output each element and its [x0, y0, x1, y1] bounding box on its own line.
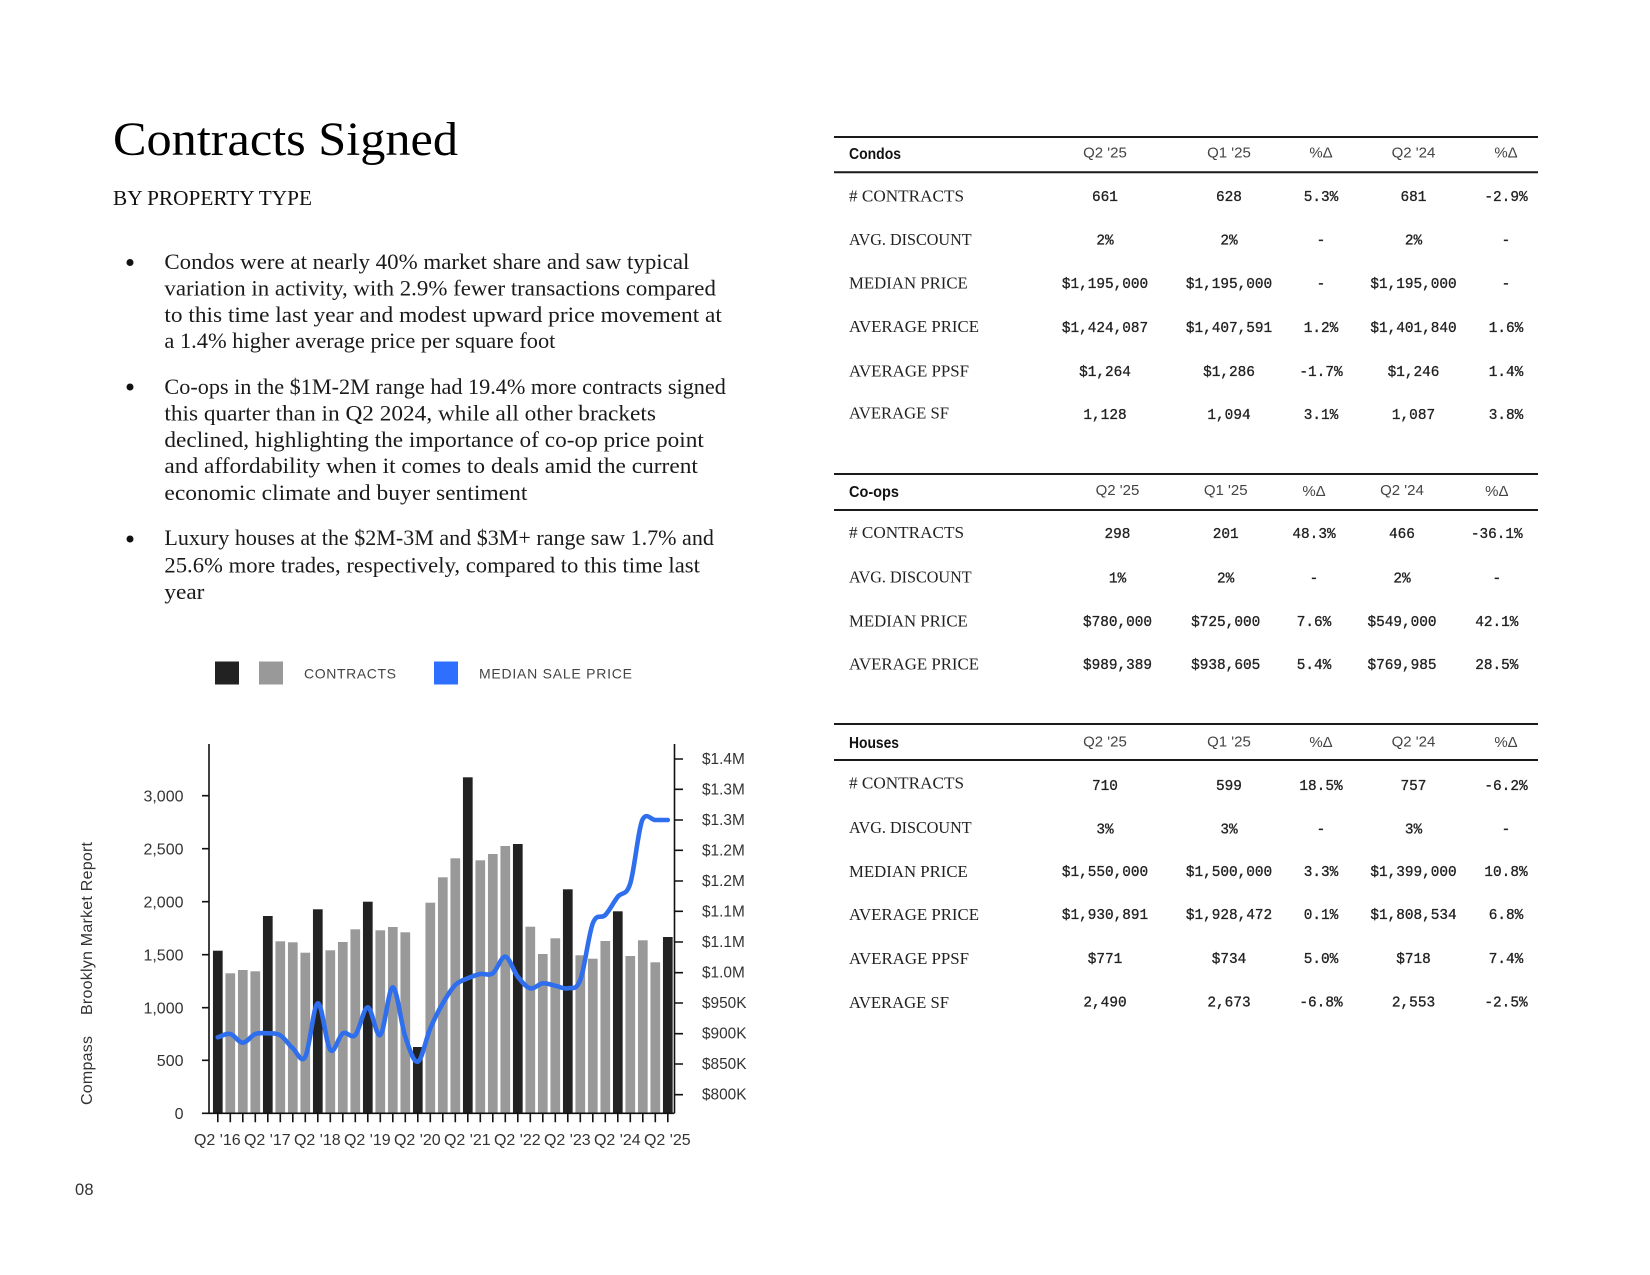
row: median price: 7.6% — [1297, 615, 1332, 631]
header row: %Δ — [1494, 144, 1518, 162]
right axis labels: $1.1M — [702, 934, 745, 951]
title: Contracts Signed — [113, 113, 458, 166]
right axis labels: $900K — [702, 1026, 747, 1042]
x axis labels: Q2 '21 — [444, 1132, 491, 1149]
row: average price: 0.1% — [1304, 908, 1339, 924]
row: avg discount — [849, 818, 1510, 838]
right axis labels: $800K — [702, 1086, 747, 1104]
header row: %Δ — [1302, 483, 1326, 500]
row: # contracts: 681 — [1401, 190, 1426, 206]
side label: Brooklyn Market Report — [79, 841, 96, 1015]
row: # contracts — [849, 186, 1528, 206]
row: avg discount: 3% — [1096, 822, 1114, 838]
header row: Co-ops — [849, 484, 899, 501]
row: average price: $1,808,534 — [1370, 908, 1457, 924]
subtitle: BY PROPERTY TYPE — [113, 186, 312, 210]
bullet list — [126, 249, 726, 604]
row: # contracts: 5.3% — [1304, 190, 1339, 206]
row: average price: AVERAGE PRICE — [849, 654, 979, 674]
header row — [849, 734, 1518, 752]
row: average price: $769,985 — [1367, 658, 1437, 674]
row: average sf: AVERAGE SF — [849, 993, 949, 1012]
row: avg discount: 2% — [1217, 571, 1235, 587]
row: median price: - — [1502, 277, 1510, 293]
right axis labels: $1.1M — [702, 904, 745, 920]
page number: 08 — [75, 1181, 94, 1199]
right axis labels: $1.3M — [702, 782, 745, 798]
row: median price: $1,550,000 — [1062, 865, 1148, 881]
row: average price: $1,401,840 — [1370, 321, 1457, 337]
row: average ppsf: $1,246 — [1388, 365, 1439, 381]
left axis labels: 500 — [157, 1053, 184, 1070]
row: # contracts — [849, 523, 1523, 543]
row: average sf: AVERAGE SF — [849, 404, 949, 422]
header row: Q2 '25 — [1083, 734, 1127, 750]
legend: MEDIAN SALE PRICE — [479, 666, 632, 682]
row: average price: 1.2% — [1304, 321, 1339, 337]
row: median price: $549,000 — [1367, 615, 1437, 631]
bullet: co-ops: Co-ops in the $1M-2M range had 19.4% more contracts signed — [164, 374, 726, 399]
row: average ppsf: $1,286 — [1203, 365, 1255, 381]
side label — [79, 841, 96, 1105]
left axis labels: 1,000 — [143, 1000, 184, 1018]
row: avg discount: 3% — [1220, 822, 1238, 838]
row: median price: 10.8% — [1484, 865, 1528, 881]
row: avg discount: 2% — [1393, 571, 1411, 587]
bullet: houses: 25.6% more trades, respectively, compared to this time last — [164, 552, 700, 578]
bullet: co-ops: declined, highlighting the importance of co-op price point — [164, 427, 704, 452]
row: avg discount: 2% — [1096, 234, 1114, 250]
row: average ppsf: 5.0% — [1304, 952, 1339, 968]
row: median price: 3.3% — [1304, 865, 1339, 881]
row: avg discount: 1% — [1109, 571, 1126, 587]
right axis labels — [702, 751, 747, 1104]
left axis labels: 1,500 — [143, 948, 184, 964]
row: median price: - — [1317, 277, 1325, 293]
left axis — [202, 744, 674, 1113]
row: average ppsf — [849, 362, 1524, 381]
row: median price: MEDIAN PRICE — [849, 612, 968, 630]
bullet: co-ops: economic climate and buyer sentiment — [164, 480, 527, 505]
row: median price: $1,500,000 — [1186, 865, 1272, 881]
bullet: co-ops: this quarter than in Q2 2024, while all other brackets — [164, 400, 656, 426]
row: average price: 28.5% — [1475, 658, 1519, 674]
row: median price: 42.1% — [1475, 615, 1519, 631]
row: average price: AVERAGE PRICE — [849, 905, 979, 924]
bullet: houses — [126, 525, 714, 604]
row: average sf: 1,087 — [1392, 408, 1435, 424]
header row: Q2 '25 — [1083, 144, 1127, 162]
row: average price: AVERAGE PRICE — [849, 317, 979, 336]
row: average sf: -6.8% — [1299, 996, 1343, 1012]
row: average sf: 2,553 — [1392, 996, 1435, 1012]
row: avg discount: - — [1502, 822, 1510, 838]
header row: Condos — [849, 146, 901, 163]
right axis labels: $1.2M — [702, 842, 745, 860]
row: avg discount — [849, 230, 1510, 250]
row: median price: $780,000 — [1083, 615, 1152, 631]
right axis labels: $1.4M — [702, 751, 745, 768]
row: avg discount: 3% — [1405, 822, 1422, 838]
x axis labels: Q2 '22 — [494, 1132, 541, 1149]
row: average price: $1,407,591 — [1186, 321, 1272, 337]
header row — [849, 144, 1518, 163]
row: average price: $1,930,891 — [1062, 908, 1148, 924]
row: average price: $1,424,087 — [1062, 321, 1148, 337]
header row: Q1 '25 — [1204, 482, 1248, 499]
right axis labels: $1.2M — [702, 873, 745, 890]
x axis labels — [194, 1132, 691, 1149]
header row: Q2 '24 — [1392, 734, 1435, 750]
row: average ppsf: 7.4% — [1489, 952, 1524, 968]
row: average ppsf: 1.4% — [1489, 365, 1524, 381]
row: # contracts: 201 — [1213, 527, 1239, 543]
bullet: houses: year — [164, 579, 205, 604]
row: average ppsf: $734 — [1212, 952, 1246, 968]
left axis labels: 0 — [175, 1106, 184, 1123]
row: average price — [849, 654, 1519, 674]
row: average ppsf: -1.7% — [1299, 365, 1343, 381]
row: median price — [849, 612, 1519, 631]
row: average price: $938,605 — [1191, 658, 1260, 674]
row: # contracts: 466 — [1389, 527, 1415, 543]
row: # contracts: 628 — [1216, 190, 1242, 206]
row: # contracts: # CONTRACTS — [849, 186, 964, 206]
row: median price: $1,195,000 — [1186, 277, 1272, 293]
row: avg discount: - — [1317, 822, 1325, 838]
right axis labels: $1.0M — [702, 964, 745, 982]
row: median price: MEDIAN PRICE — [849, 274, 968, 292]
left axis labels — [143, 788, 184, 1123]
row: # contracts: 710 — [1092, 779, 1118, 795]
row: average ppsf: $718 — [1396, 952, 1431, 968]
x axis ticks — [218, 1113, 668, 1122]
bullet: condos: Condos were at nearly 40% market share and saw typical — [164, 249, 689, 274]
row: # contracts: -2.9% — [1484, 190, 1528, 206]
header row: %Δ — [1309, 734, 1333, 751]
side label: Compass — [79, 1036, 96, 1105]
row: # contracts: 599 — [1216, 779, 1242, 795]
row: avg discount: AVG. DISCOUNT — [849, 818, 972, 837]
row: average ppsf: $771 — [1088, 952, 1122, 968]
bullet: condos: variation in activity, with 2.9% fewer transactions compared — [164, 276, 716, 300]
row: # contracts: 661 — [1092, 190, 1118, 206]
row: average ppsf — [849, 949, 1524, 968]
row: # contracts: 757 — [1401, 779, 1426, 795]
row: median price: $1,399,000 — [1370, 865, 1457, 881]
line: median sale price — [218, 816, 668, 1062]
row: median price — [849, 274, 1510, 293]
row: avg discount: AVG. DISCOUNT — [849, 230, 972, 249]
row: avg discount: - — [1502, 234, 1510, 250]
legend: CONTRACTS — [304, 666, 396, 682]
header row: Q1 '25 — [1207, 144, 1251, 162]
header row: Q2 '25 — [1096, 482, 1139, 499]
row: median price: $1,195,000 — [1062, 277, 1148, 293]
right axis — [674, 744, 683, 1113]
table: co-ops — [834, 474, 1538, 674]
x axis labels: Q2 '24 — [594, 1132, 641, 1149]
header row: %Δ — [1309, 144, 1333, 162]
x axis labels: Q2 '23 — [544, 1132, 591, 1149]
row: average sf — [849, 404, 1524, 424]
header row: %Δ — [1485, 483, 1508, 500]
row: average sf: 1,128 — [1083, 408, 1127, 424]
x axis labels: Q2 '17 — [244, 1132, 291, 1149]
row: average sf: 3.1% — [1304, 408, 1339, 424]
row: median price — [849, 862, 1528, 881]
header row: %Δ — [1494, 734, 1518, 751]
right axis labels: $850K — [702, 1056, 747, 1073]
row: # contracts — [849, 774, 1528, 795]
header row: Houses — [849, 735, 899, 752]
header row: Q1 '25 — [1207, 734, 1251, 750]
right axis labels: $950K — [702, 995, 747, 1012]
x axis labels: Q2 '25 — [644, 1132, 691, 1149]
row: average price: 5.4% — [1297, 658, 1332, 674]
row: avg discount: - — [1492, 571, 1501, 587]
row: median price: $1,195,000 — [1370, 277, 1457, 293]
left axis labels: 2,500 — [143, 842, 184, 858]
row: avg discount: 2% — [1220, 234, 1238, 250]
left axis labels: 2,000 — [143, 894, 184, 912]
row: average ppsf: AVERAGE PPSF — [849, 362, 969, 380]
row: average sf: -2.5% — [1484, 996, 1528, 1012]
row: # contracts: # CONTRACTS — [849, 774, 964, 792]
row: average sf: 2,490 — [1083, 996, 1127, 1012]
row: # contracts: 298 — [1105, 527, 1130, 543]
row: avg discount: 2% — [1405, 234, 1422, 250]
bullet: houses: Luxury houses at the $2M-3M and $3M+ range saw 1.7% and — [164, 525, 714, 550]
row: average price: 6.8% — [1489, 908, 1524, 924]
bar and line chart — [143, 744, 747, 1149]
bullet: condos: to this time last year and modest upward price movement at — [164, 302, 722, 327]
x axis labels: Q2 '20 — [394, 1132, 441, 1149]
row: median price: MEDIAN PRICE — [849, 862, 968, 881]
row: average ppsf: AVERAGE PPSF — [849, 949, 969, 968]
x axis labels: Q2 '19 — [344, 1132, 391, 1149]
row: avg discount: - — [1310, 571, 1318, 587]
row: average price: 1.6% — [1489, 321, 1524, 337]
table: houses — [834, 724, 1538, 1012]
row: median price: $725,000 — [1191, 615, 1260, 631]
legend — [215, 662, 632, 684]
row: # contracts: -6.2% — [1484, 779, 1528, 795]
row: average sf: 2,673 — [1207, 996, 1251, 1012]
header row: Q2 '24 — [1380, 482, 1424, 499]
row: average sf: 1,094 — [1207, 408, 1251, 424]
row: avg discount: AVG. DISCOUNT — [849, 568, 972, 586]
row: average price — [849, 905, 1524, 924]
bullet: co-ops: and affordability when it comes to deals amid the current — [164, 453, 698, 478]
row: # contracts: 48.3% — [1292, 527, 1336, 543]
row: # contracts: 18.5% — [1299, 779, 1343, 795]
x axis labels: Q2 '16 — [194, 1132, 241, 1149]
bullet: condos — [126, 249, 722, 353]
row: average ppsf: $1,264 — [1079, 365, 1131, 381]
right axis labels: $1.3M — [702, 812, 745, 829]
row: avg discount — [849, 568, 1501, 587]
row: average price — [849, 317, 1524, 337]
row: average price: $1,928,472 — [1186, 908, 1272, 924]
row: average sf — [849, 993, 1528, 1012]
x axis labels: Q2 '18 — [294, 1132, 341, 1149]
row: average sf: 3.8% — [1489, 408, 1524, 424]
header row — [849, 482, 1508, 501]
row: average price: $989,389 — [1083, 658, 1152, 674]
bullet: condos: a 1.4% higher average price per square foot — [164, 328, 555, 353]
header row: Q2 '24 — [1392, 144, 1435, 162]
row: # contracts: -36.1% — [1471, 527, 1523, 543]
table: condos — [834, 137, 1538, 424]
bars: contracts — [213, 777, 673, 1113]
row: avg discount: - — [1317, 234, 1325, 250]
bullet: co-ops — [126, 374, 726, 505]
row: # contracts: # CONTRACTS — [849, 523, 964, 542]
left axis labels: 3,000 — [143, 788, 184, 806]
